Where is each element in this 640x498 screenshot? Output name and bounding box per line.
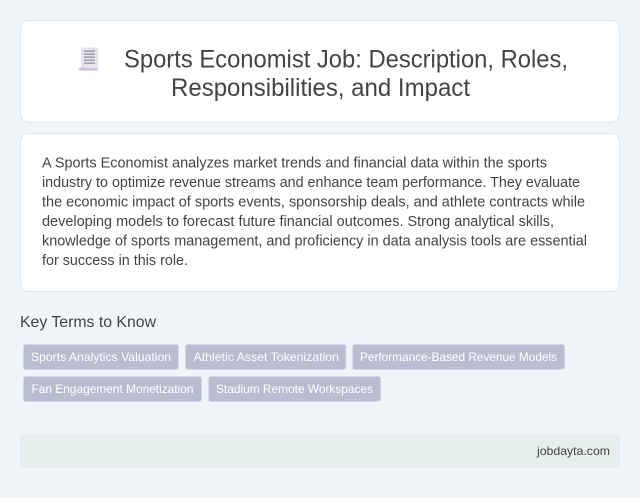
tag: stadium remote workspaces: Stadium Remote Workspaces — [216, 382, 373, 396]
tag: sports analytics valuation — [24, 344, 178, 370]
description text: industry to optimize revenue streams and enhance team performance. They evaluate — [42, 175, 580, 191]
panel: description — [20, 134, 620, 292]
panel: title header — [20, 20, 620, 122]
description text: knowledge of sports management, and proficiency in data analysis tools are essential — [42, 234, 587, 250]
tag: sports analytics valuation: Sports Analytics Valuation — [31, 350, 171, 364]
footer bar: jobdayta.com — [536, 444, 610, 458]
heading: key terms: Key Terms to Know — [20, 314, 156, 331]
tag: fan engagement monetization — [24, 376, 202, 402]
description text: the economic impact of sports events, sponsorship deals, and athlete contracts while — [42, 194, 585, 210]
description text — [42, 156, 587, 269]
tag: fan engagement monetization: Fan Engagement Monetization — [32, 382, 194, 396]
tag: athletic asset tokenization — [186, 344, 346, 370]
tag: performance-based revenue models — [352, 344, 564, 370]
title text: Responsibilities, and Impact — [171, 74, 470, 102]
title text: Sports Economist Job: Description, Roles, — [124, 46, 568, 74]
tag: stadium remote workspaces — [208, 376, 380, 402]
description text: for success in this role. — [42, 253, 188, 269]
description text: A Sports Economist analyzes market trends and financial data within the sports — [42, 156, 547, 172]
description text: developing models to forecast future financial outcomes. Strong analytical skills, — [42, 214, 554, 230]
tags: key terms — [24, 344, 564, 402]
tag: athletic asset tokenization: Athletic Asset Tokenization — [194, 350, 339, 364]
footer bar — [20, 434, 620, 468]
icon: document scroll — [78, 48, 98, 70]
title text — [124, 46, 568, 102]
tag: performance-based revenue models: Performance-Based Revenue Models — [360, 350, 557, 364]
